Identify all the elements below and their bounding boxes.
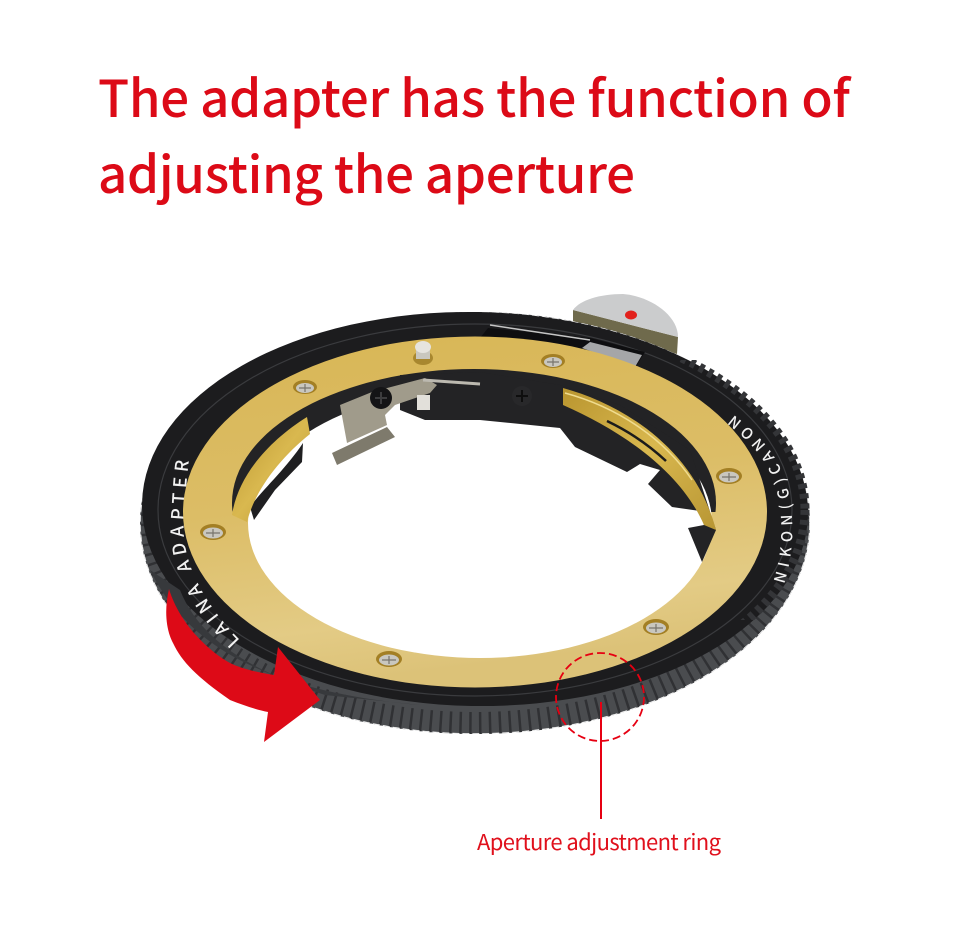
leader line — [600, 702, 602, 819]
aperture adjustment tab — [573, 294, 678, 354]
title: The adapter has the function of — [98, 58, 852, 132]
adapter ring — [140, 294, 810, 734]
callout label: Aperture adjustment ring — [477, 825, 722, 857]
lens opening — [248, 388, 712, 658]
left inner lip — [232, 417, 310, 522]
right inner lip — [563, 388, 716, 530]
slot with metal sliver — [480, 325, 645, 368]
black top face — [139, 306, 811, 712]
lens mount engraving right: NIKON(G)CANON — [728, 416, 794, 583]
right side knurl — [680, 360, 810, 620]
title — [98, 58, 852, 208]
black screw on flange — [512, 386, 532, 406]
title: adjusting the aperture — [98, 134, 635, 208]
knurled aperture ring body — [140, 312, 810, 734]
black screw on lever — [370, 387, 392, 409]
black inner flange — [232, 372, 716, 562]
red rotation arrow — [166, 589, 320, 742]
dashed highlight circle — [556, 653, 644, 741]
lock lever — [332, 378, 480, 465]
mount screws — [200, 354, 742, 667]
locating pin — [413, 341, 433, 365]
lens mount engraving left: LAINA ADAPTER — [170, 460, 239, 648]
lower left grey face — [150, 570, 420, 705]
dark inner recess — [232, 369, 716, 512]
brass bayonet plate — [183, 336, 767, 688]
